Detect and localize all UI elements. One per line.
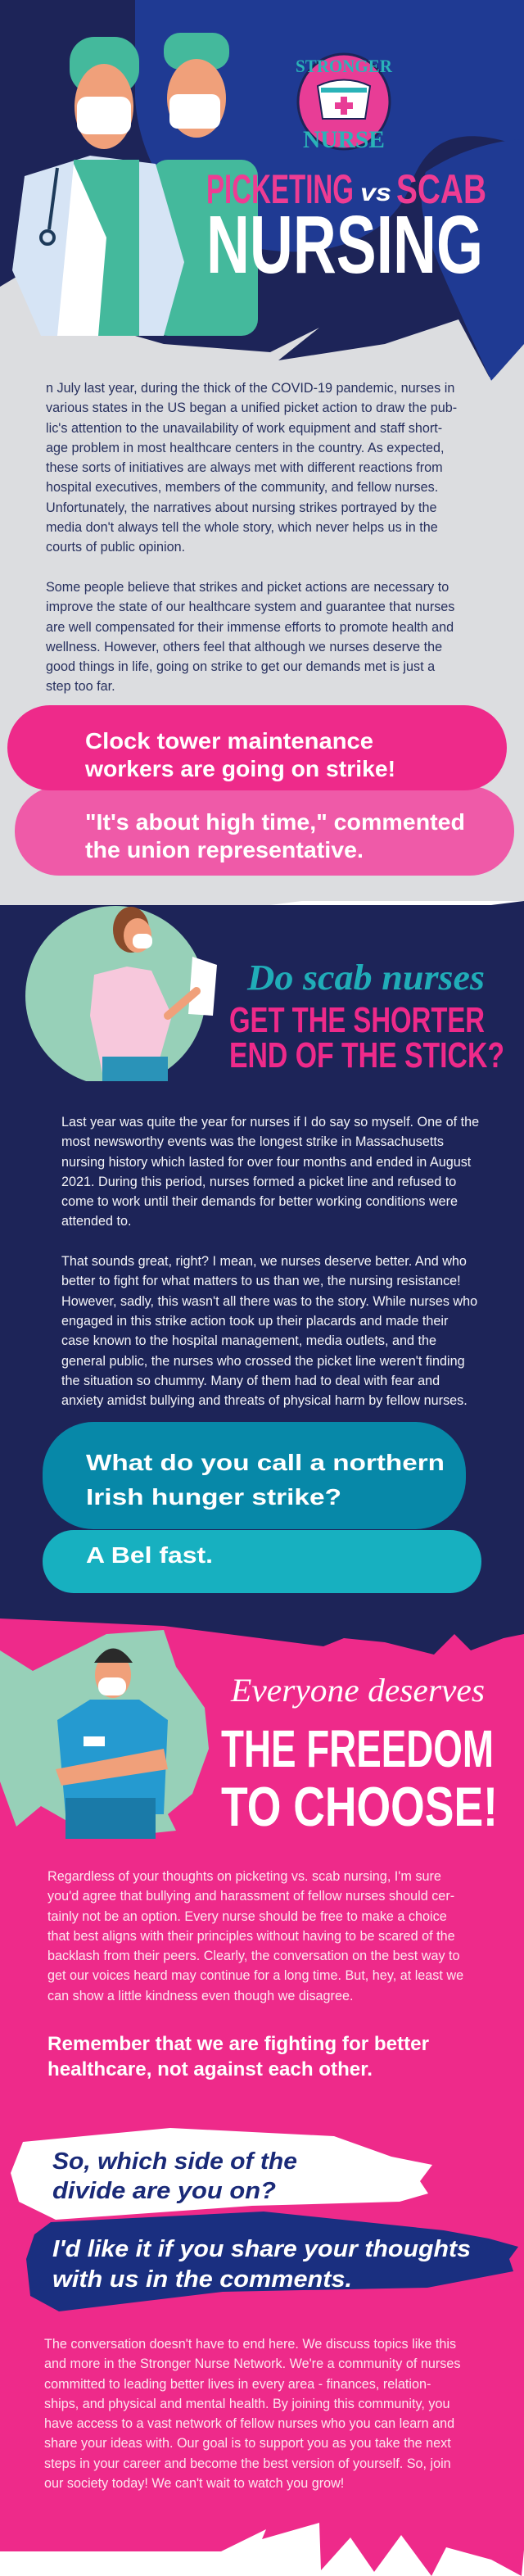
text block: conclusion: steps in your career and become the best version of yourself. So, join [44,2456,451,2471]
text block: intro: are well compensated for their immense efforts to promote health and [46,620,454,635]
text block: freedom: backlash from their peers. Clearly, the conversation on the best way to [47,1949,460,1963]
text block: conclusion: share your ideas with. Our goal is to support you as you take the next [44,2436,451,2451]
callout: navy brush [26,2212,518,2311]
illustration: two nurses [12,33,258,336]
text block: Massachusetts strike: general public, the nurses who crossed the picket line weren't finding [61,1354,465,1369]
text block: Massachusetts strike: 2021. During this period, nurses formed a picket line and refused to [61,1175,456,1189]
text block: conclusion [44,2337,460,2491]
text block: Massachusetts strike: nursing history which lasted for over four months and ended in August [61,1155,471,1170]
text block: intro: media don't always tell the whole story, which never helps us in the [46,520,438,535]
logo: Stronger Nurse: STRONGER [296,56,393,76]
callout: joke pill 3: Irish hunger strike? [86,1484,341,1510]
logo: Stronger Nurse: NURSE [303,126,385,153]
callout: joke pill 1: Clock tower maintenance [85,728,373,754]
text block: freedom [47,1869,463,2003]
logo: Stronger Nurse [296,52,393,153]
text block: intro: wellness. However, others feel that although we nurses deserve the [46,640,442,654]
text block: Massachusetts strike: Last year was quite the year for nurses if I do say so myself. One of the [61,1115,479,1130]
callout: joke pill 3: What do you call a northern [86,1450,445,1475]
text block: intro: Some people believe that strikes and picket actions are necessary to [46,580,449,595]
heading: Everyone deserves the freedom to choose: Everyone deserves [230,1672,485,1709]
text block: intro: step too far. [46,679,115,694]
text block: intro: these sorts of initiatives are always met with different reactions from [46,460,443,475]
callout: navy brush: with us in the comments. [52,2266,352,2293]
text block: conclusion: The conversation doesn't have to end here. We discuss topics like this [44,2337,456,2352]
heading: Do scab nurses get the shorter end of the stick [229,958,504,1073]
text block: conclusion: our society today! We can't wait to watch you grow! [44,2476,344,2491]
callout: white brush question: So, which side of the [52,2148,297,2175]
text block: intro: various states in the US began a unified picket action to draw the pub- [46,401,457,415]
text block: remember: healthcare, not against each other. [47,2058,373,2080]
text block: intro: n July last year, during the thick of the COVID-19 pandemic, nurses in [46,381,454,396]
text block: Massachusetts strike: case known to the hospital management, media outlets, and the [61,1333,436,1348]
title: PICKETING [206,166,354,212]
text block: Massachusetts strike: That sounds great, right? I mean, we nurses deserve better. And who [61,1254,467,1269]
text block: Massachusetts strike: better to fight for what matters to us than we, the nursing resistance! [61,1274,461,1288]
text block: freedom: tainly not be an option. Every nurse should be free to make a choice [47,1909,447,1924]
title: vs [360,179,391,206]
text block: conclusion: committed to leading better lives in every area - finances, relation- [44,2377,431,2392]
text block: intro: Unfortunately, the narratives about nursing strikes portrayed by the [46,500,436,515]
text block: remember: Remember that we are fighting for better [47,2033,429,2055]
text block: freedom: that best aligns with their principles without having to be scared of the [47,1929,455,1944]
callout: joke pill 3 [43,1422,466,1529]
callout: joke pill 2: the union representative. [85,837,364,862]
text block: freedom: Regardless of your thoughts on picketing vs. scab nursing, I'm sure [47,1869,441,1884]
text block: intro: hospital executives, members of the community, and fellow nurses. [46,480,438,495]
heading: Do scab nurses get the shorter end of the stick: Do scab nurses [246,958,485,998]
callout: joke pill 4: A Bel fast. [86,1542,213,1568]
callout: joke pill 4 [43,1530,481,1593]
illustration: nurse with clipboard [25,906,217,1081]
text block: Massachusetts strike: come to work until their demands for better working conditions were [61,1194,458,1209]
text block: intro: courts of public opinion. [46,540,185,555]
callout: joke pill 1 [7,705,507,790]
text block: Massachusetts strike: anxiety amidst bullying and threats of physical harm by fellow nurses. [61,1393,468,1408]
text block: Massachusetts strike: However, sadly, this wasn't all there was to the story. While nurses who [61,1294,477,1309]
callout: joke pill 2: "It's about high time," commented [85,809,465,835]
title [206,166,486,275]
callout: white brush question: divide are you on? [52,2178,276,2204]
text block: intro: age problem in most healthcare centers in the country. As expected, [46,441,444,455]
text block: freedom: you'd agree that bullying and harassment of fellow nurses should cer- [47,1889,454,1904]
callout: joke pill 1: workers are going on strike! [84,756,395,781]
text block: Massachusetts strike: the situation so chummy. Many of them had to deal with fear and [61,1374,440,1388]
text block: conclusion: have access to a vast network of fellow nurses who you can learn and [44,2416,454,2431]
text block: remember [47,2033,429,2080]
text block: intro: improve the state of our healthcare system and guarantee that nurses [46,600,454,614]
text block: intro: good things in life, going on strike to get our demands met is just a [46,659,435,674]
callout: navy brush: I'd like it if you share your thoughts [52,2236,471,2262]
text block: Massachusetts strike: engaged in this strike action took up their placards and made their [61,1314,448,1329]
text block: Massachusetts strike: most newsworthy events was the longest strike in Massachusetts [61,1134,444,1149]
callout: white brush question [11,2128,432,2220]
text block: Massachusetts strike: attended to. [61,1214,132,1229]
text block: conclusion: and more in the Stronger Nurse Network. We're a community of nurses [44,2356,460,2371]
text block: conclusion: ships, and physical and mental health. By joining this community, you [44,2397,449,2411]
heading: Everyone deserves the freedom to choose [221,1672,498,1831]
text block: intro [46,381,457,694]
text block: freedom: get our voices heard may continue for a long time. But, hey, at least we [47,1968,463,1983]
text block: freedom: can show a little kindness even though we disagree. [47,1989,353,2003]
text block: intro: lic's attention to the unavailability of work equipment and staff short- [46,421,442,436]
text block: Massachusetts strike [61,1115,479,1408]
callout: joke pill 2 [15,786,514,876]
illustration: male nurse with crossed arms [0,1630,209,1839]
